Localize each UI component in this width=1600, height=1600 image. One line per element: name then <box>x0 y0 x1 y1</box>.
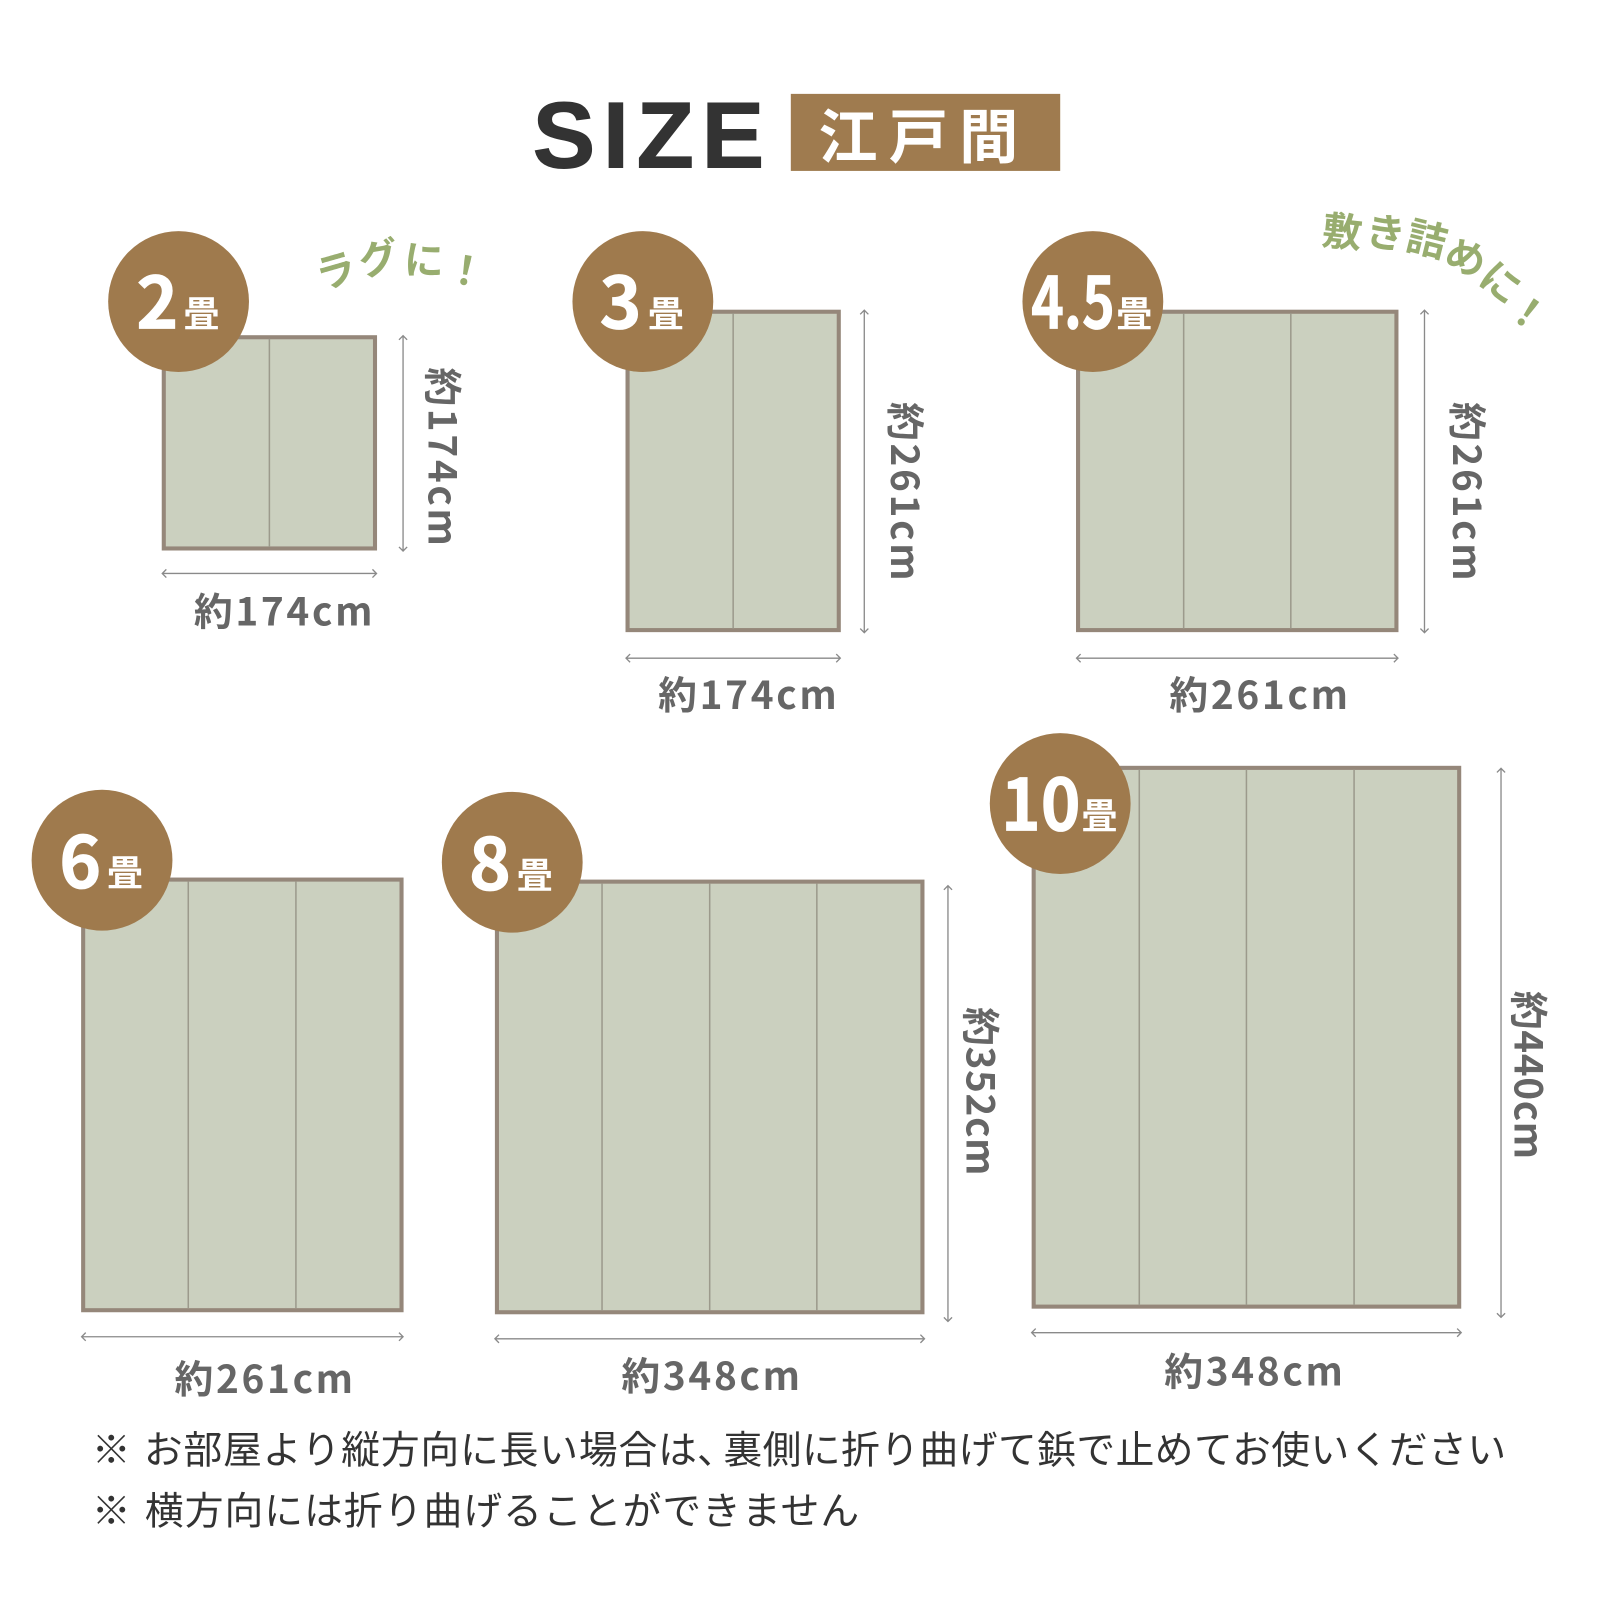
width arrow <box>1032 1329 1461 1337</box>
badge: 2畳: 2 <box>136 246 178 350</box>
width label: 約174cm <box>658 665 837 721</box>
callout: 敷き詰めに！: に <box>1469 246 1535 316</box>
badge: 3畳: 3 <box>599 246 642 350</box>
callout: ラグに！ <box>308 225 491 302</box>
width arrow <box>162 569 377 578</box>
panel: 8畳 <box>442 792 1010 1402</box>
height arrow <box>944 886 952 1321</box>
width label: 約348cm <box>1164 1342 1343 1398</box>
height label: 約352cm <box>954 1007 1010 1176</box>
badge: 2畳 <box>108 231 249 372</box>
note line 2: 横方向には折り曲げることができません <box>145 1480 859 1536</box>
note line 1: 、 <box>697 1419 736 1475</box>
panel: 4.5畳 <box>1022 231 1497 721</box>
width arrow <box>82 1333 403 1341</box>
title tag: 江戸間: 江戸間 <box>818 90 1018 176</box>
badge: 6畳 <box>32 790 172 931</box>
title word: SIZE: SIZE <box>533 82 764 187</box>
height label: 約440cm <box>1502 991 1558 1159</box>
badge: 6畳: 畳 <box>107 846 143 897</box>
panel: 2畳 <box>108 231 473 638</box>
note line 1 <box>92 1419 1506 1475</box>
badge: 8畳: 8 <box>469 807 511 911</box>
height arrow <box>1497 768 1505 1317</box>
width arrow <box>1077 654 1398 662</box>
callout: 敷き詰めに！: ！ <box>1496 276 1561 346</box>
badge: 10畳: 畳 <box>1082 789 1117 840</box>
tatami mat: 3畳 <box>628 312 839 630</box>
height label: 約261cm <box>879 402 935 581</box>
badge: 3畳 <box>572 231 713 372</box>
note line 1: 裏側に折り曲げて鋲で止めてお使いください <box>723 1419 1506 1475</box>
callout: ラグに！: ！ <box>442 237 491 300</box>
height arrow <box>399 336 407 551</box>
callout: ラグに！: ラ <box>308 236 362 302</box>
title <box>533 82 1060 187</box>
notes <box>92 1419 1506 1536</box>
height arrow <box>1420 310 1429 633</box>
callout: ラグに！: グ <box>354 225 403 288</box>
badge: 10畳 <box>990 733 1131 874</box>
width arrow <box>495 1335 924 1343</box>
badge: 10畳: 10 <box>1001 748 1081 852</box>
height label: 約174cm <box>417 367 473 546</box>
callout: 敷き詰めに！: 詰 <box>1401 205 1454 270</box>
tatami mat: 2畳 <box>164 337 375 548</box>
note line 1: お部屋より縦方向に長い場合は <box>144 1419 697 1475</box>
width label: 約261cm <box>174 1349 353 1405</box>
badge: 3畳: 畳 <box>648 287 684 338</box>
badge: 4.5畳: 畳 <box>1116 287 1152 338</box>
tatami mat: 6畳 <box>83 880 402 1310</box>
tatami mat: 8畳 <box>497 882 922 1312</box>
badge: 8畳 <box>442 792 583 933</box>
badge: 4.5畳: 4.5 <box>1031 246 1115 350</box>
callout: 敷き詰めに！ <box>1320 199 1561 346</box>
callout: 敷き詰めに！: め <box>1437 221 1497 290</box>
badge: 8畳: 畳 <box>517 848 553 899</box>
badge: 4.5畳 <box>1022 231 1163 372</box>
callout: 敷き詰めに！: 敷 <box>1320 199 1365 260</box>
tatami mat: 10畳 <box>1034 768 1459 1307</box>
width label: 約174cm <box>194 582 372 638</box>
panel: 10畳 <box>990 733 1558 1398</box>
height arrow <box>860 310 868 633</box>
callout: 敷き詰めに！: き <box>1362 200 1410 262</box>
height label: 約261cm <box>1441 402 1497 581</box>
width arrow <box>626 654 840 662</box>
callout: ラグに！: に <box>403 229 445 287</box>
panel: 6畳 <box>32 790 403 1405</box>
note line 2: ※ <box>92 1480 131 1536</box>
tatami mat: 4.5畳 <box>1078 312 1396 630</box>
badge: 6畳: 6 <box>59 805 101 909</box>
width label: 約348cm <box>621 1346 800 1402</box>
badge: 2畳: 畳 <box>184 287 219 338</box>
panel: 3畳 <box>572 231 935 721</box>
width label: 約261cm <box>1169 665 1348 721</box>
note line 1: ※ <box>92 1419 131 1475</box>
